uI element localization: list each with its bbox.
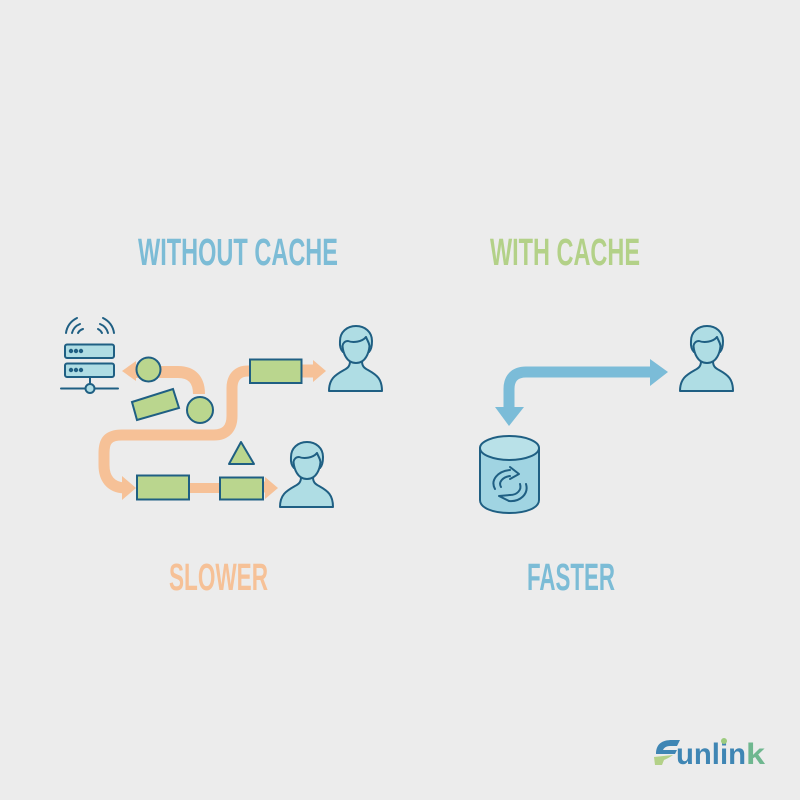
arrow: blue fast path [495, 359, 668, 426]
green shapes: data packets [132, 358, 302, 500]
logo: Funlink [654, 738, 765, 771]
heading: with cache: WITH CACHE [490, 232, 640, 274]
icon: cache database with refresh symbol [480, 436, 539, 513]
logo: Funlink: k [746, 738, 765, 771]
icon: user with cache [680, 326, 733, 391]
logo: Funlink: unlin [676, 738, 746, 771]
arrow: orange between lower boxes [187, 483, 222, 493]
arrow: orange to upper user [300, 360, 326, 382]
arrow: orange return path to server [122, 361, 199, 394]
label: faster: FASTER [527, 557, 615, 599]
icon: lower user [280, 442, 333, 507]
arrow: orange to lower user [262, 477, 278, 499]
arrow: long orange winding path [104, 371, 252, 500]
label: slower: SLOWER [169, 557, 268, 599]
icon: upper user [329, 326, 382, 391]
icon: server with wifi signals [61, 318, 118, 393]
heading: without cache: WITHOUT CACHE [138, 232, 338, 274]
